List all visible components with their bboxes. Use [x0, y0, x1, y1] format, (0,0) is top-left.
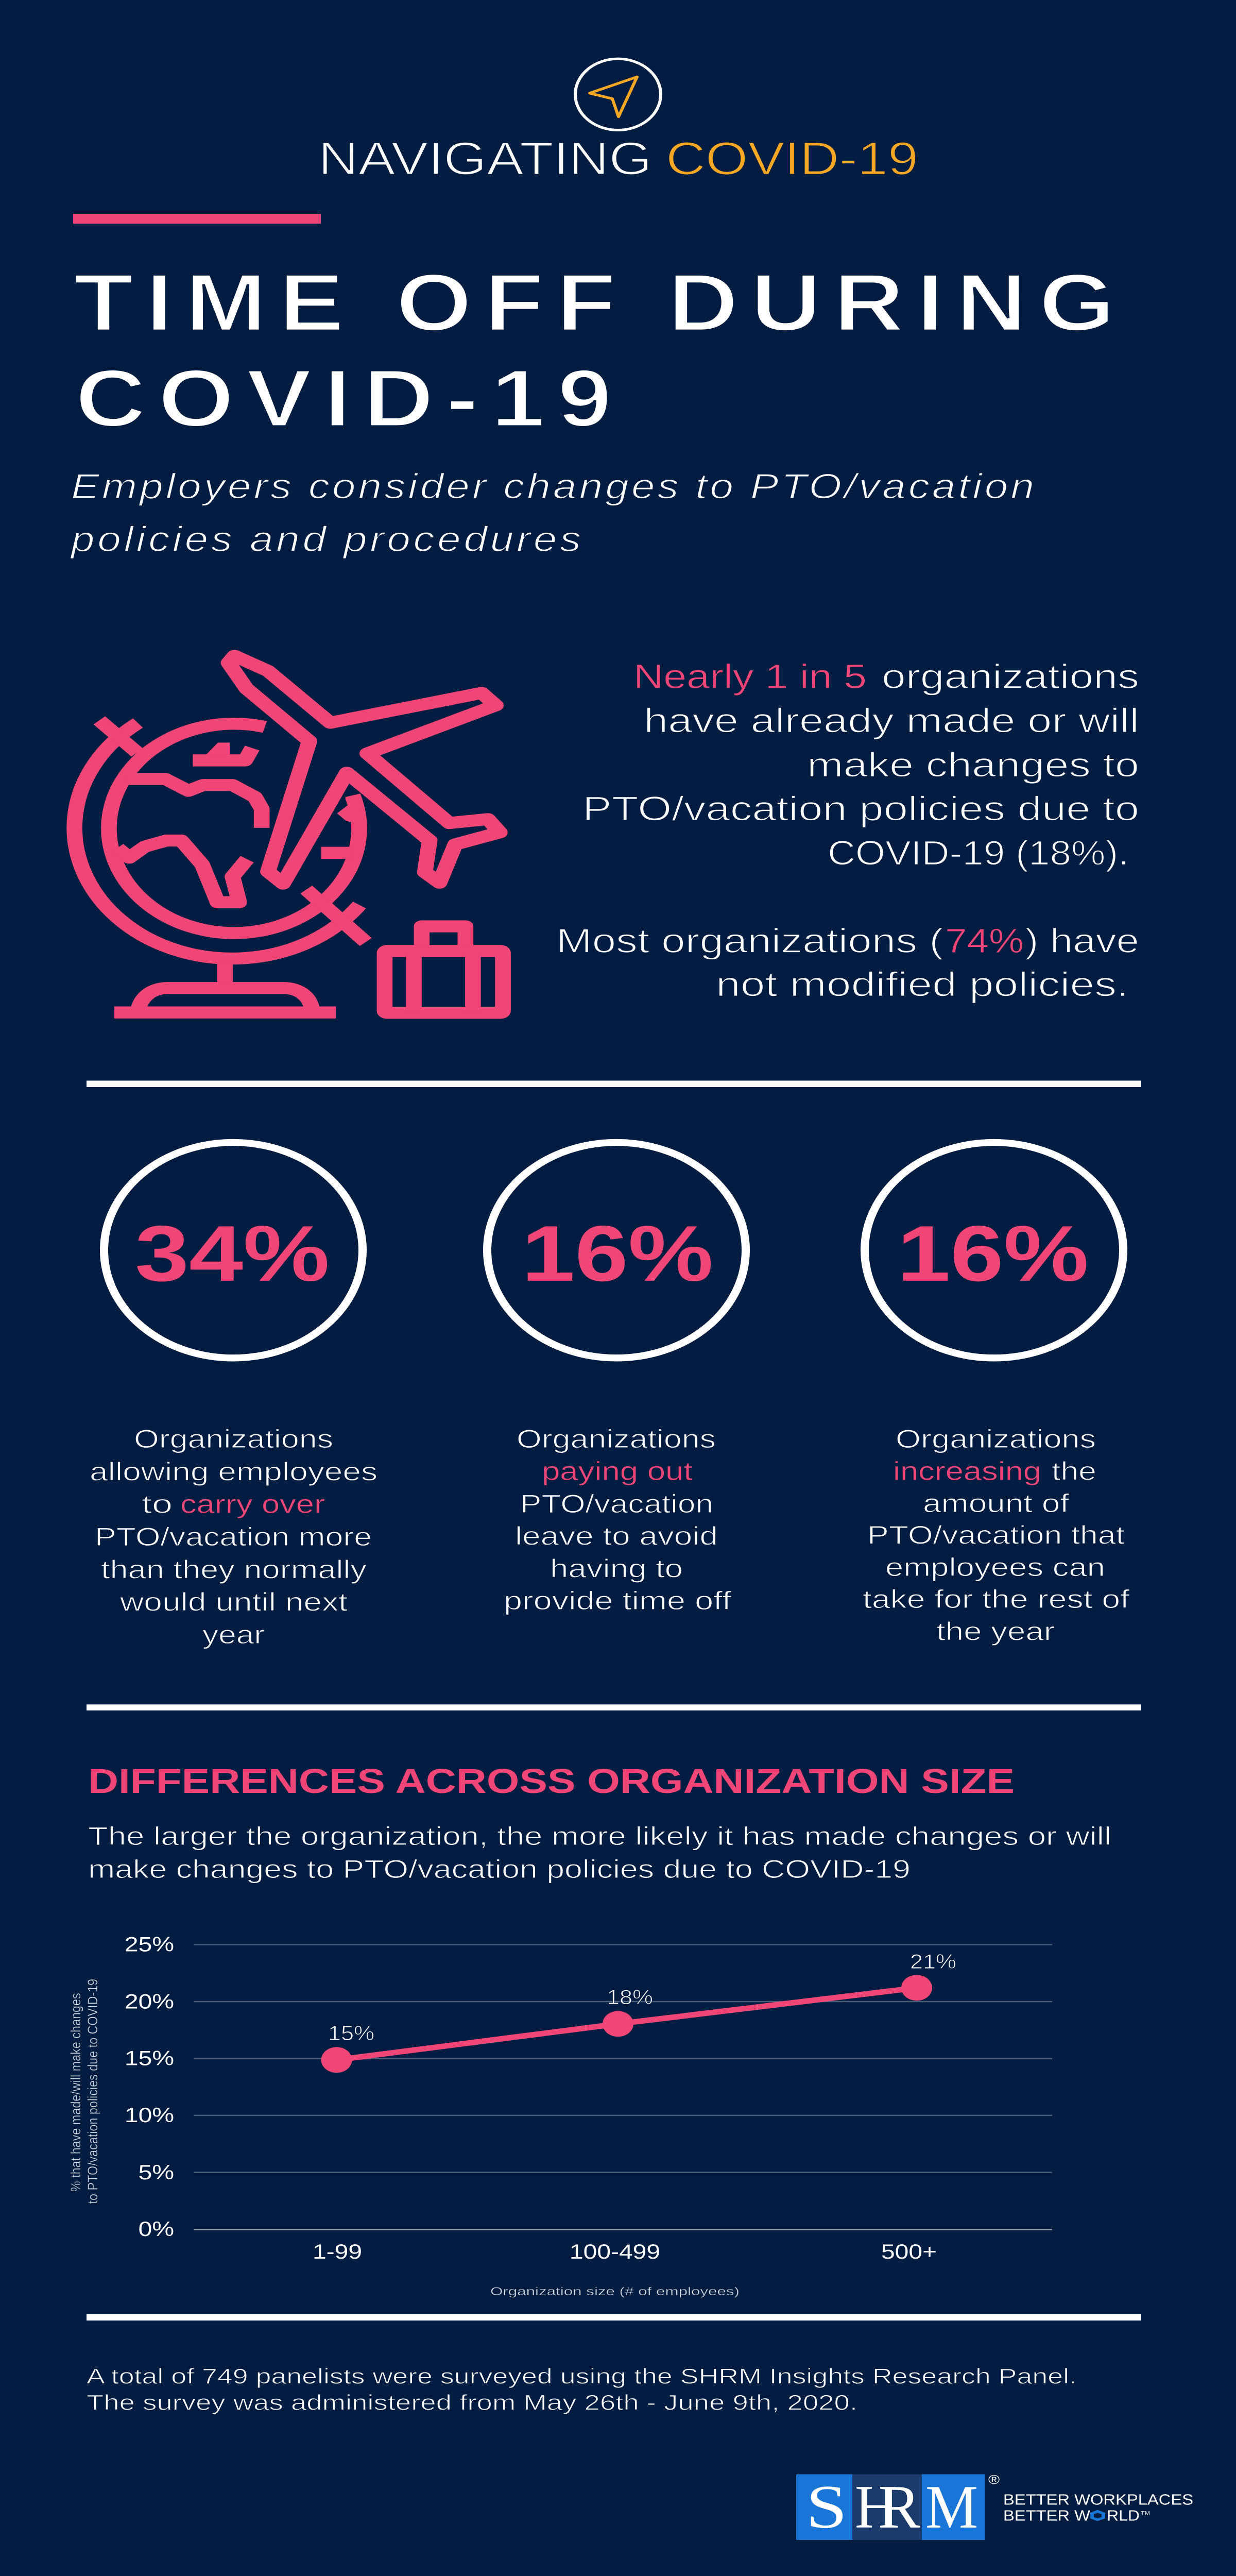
stat circle: 34% [135, 1209, 330, 1297]
description: amount of [923, 1489, 1070, 1518]
x axis title: Organization size (# of employees) [490, 2285, 740, 2298]
footnote [87, 2364, 1077, 2415]
data labels: 18% [607, 1986, 653, 2009]
stat circle: 16% [522, 1209, 713, 1297]
logo mark [796, 2472, 1000, 2541]
description: PTO/vacation that [867, 1520, 1125, 1550]
description: Organizations [896, 1425, 1096, 1453]
description: having to [550, 1554, 683, 1583]
series name [318, 133, 918, 184]
logo mark: ® [988, 2472, 1000, 2487]
footnote: The survey was administered from May 26th - June 9th, 2020. [87, 2390, 857, 2415]
logo mark: R [879, 2472, 921, 2541]
tagline: TM [1141, 2510, 1150, 2516]
intro statistics text: Most organizations ( [556, 922, 944, 960]
section description [88, 1822, 1111, 1884]
gridlines [194, 1945, 1052, 2230]
section description: The larger the organization, the more likely it has made changes or will [88, 1822, 1111, 1851]
icon: compass arrow [575, 59, 661, 130]
intro statistics text: not modified policies. [716, 965, 1129, 1004]
panel: 16% increasing [863, 1143, 1130, 1646]
globe body [109, 724, 359, 933]
description: Organizations [517, 1425, 716, 1453]
intro statistics text: 74% [945, 922, 1024, 960]
description: increasing [893, 1456, 1041, 1485]
y axis title: to PTO/vacation policies due to COVID-19 [85, 1979, 101, 2204]
description: take for the rest of [863, 1585, 1130, 1614]
section heading: DIFFERENCES ACROSS ORGANIZATION SIZE [88, 1761, 1015, 1800]
y axis labels: 25% [125, 1933, 174, 1956]
tagline: BETTER WORKPLACES [1003, 2492, 1193, 2508]
description: PTO/vacation [520, 1489, 713, 1518]
logo: SHRM [796, 2472, 1193, 2541]
description: year [202, 1620, 265, 1649]
stat circle [865, 1143, 1123, 1358]
description: the [1052, 1456, 1096, 1485]
line chart: changes by organization size [68, 1933, 1052, 2298]
stat circle [104, 1143, 363, 1358]
title [74, 258, 1115, 444]
continents [117, 742, 360, 902]
description: PTO/vacation more [95, 1522, 372, 1551]
intro statistics text: organizations [882, 657, 1139, 696]
description: to [142, 1489, 173, 1519]
description: the year [936, 1617, 1055, 1646]
divider [87, 1081, 1141, 1087]
icon: globe, airplane and suitcase [75, 656, 503, 1013]
description: leave to avoid [515, 1521, 718, 1550]
description: employees can [885, 1553, 1105, 1582]
globe stand ring [75, 723, 359, 959]
series name: NAVIGATING [318, 133, 652, 184]
description: provide time off [504, 1586, 732, 1615]
subtitle [70, 467, 1034, 558]
y axis labels: 10% [125, 2104, 174, 2127]
footnote: A total of 749 panelists were surveyed using the SHRM Insights Research Panel. [87, 2364, 1077, 2388]
x axis labels: 100-499 [570, 2241, 660, 2263]
data labels: 15% [328, 2022, 374, 2045]
tagline [1003, 2492, 1193, 2524]
intro statistics text: COVID-19 (18%). [828, 834, 1129, 872]
data labels [328, 1951, 956, 2045]
title: COVID-19 [75, 353, 612, 444]
series name: COVID-19 [666, 133, 918, 184]
y axis title: % that have made/will make changes [68, 1993, 84, 2192]
divider [87, 2314, 1141, 2320]
logo mark: S [806, 2472, 847, 2541]
x axis labels: 1-99 [313, 2241, 362, 2263]
section description: make changes to PTO/vacation policies due to COVID-19 [88, 1855, 911, 1884]
globe axis pins [99, 720, 366, 942]
description: than they normally [101, 1555, 367, 1584]
tagline: BETTER W [1003, 2507, 1090, 2524]
x axis labels [313, 2241, 937, 2263]
description: carry over [180, 1489, 325, 1519]
data line and markers [321, 1975, 932, 2073]
y axis labels: 20% [125, 1990, 174, 2013]
intro statistics text: PTO/vacation policies due to [582, 789, 1139, 828]
panel: 16% paying out [487, 1143, 746, 1615]
intro statistics text: make changes to [807, 745, 1139, 784]
y axis labels: 5% [139, 2161, 174, 2184]
title: TIME OFF DURING [74, 258, 1115, 348]
intro statistics text: Nearly 1 in 5 [633, 657, 867, 696]
logo mark: M [925, 2472, 978, 2541]
panel: 34% carry over [90, 1143, 377, 1649]
data labels: 21% [910, 1951, 956, 1973]
y axis title [68, 1979, 101, 2204]
header: navigating covid-19 [318, 59, 918, 184]
stat circle [487, 1143, 746, 1358]
logo mark: H [855, 2472, 897, 2541]
airplane [229, 656, 500, 884]
globe base [114, 962, 336, 1013]
description: Organizations [134, 1425, 333, 1453]
suitcase [385, 926, 503, 1013]
stat circle: 16% [897, 1209, 1089, 1297]
accent bar [73, 214, 321, 224]
description: allowing employees [90, 1457, 377, 1486]
y axis labels [125, 1933, 174, 2241]
y axis labels: 15% [125, 2047, 174, 2070]
tagline: RLD [1107, 2507, 1140, 2524]
intro statistics text: have already made or will [644, 701, 1139, 740]
description [90, 1425, 377, 1649]
description: paying out [542, 1456, 693, 1485]
description [863, 1425, 1130, 1646]
intro statistics text [556, 657, 1139, 1004]
y axis labels: 0% [139, 2218, 174, 2241]
subtitle: Employers consider changes to PTO/vacation [71, 467, 1034, 506]
subtitle: policies and procedures [70, 519, 581, 558]
intro statistics text: ) have [1025, 922, 1139, 960]
description: would until next [119, 1587, 348, 1617]
x axis labels: 500+ [881, 2241, 937, 2263]
description [504, 1425, 732, 1615]
divider [87, 1704, 1141, 1710]
